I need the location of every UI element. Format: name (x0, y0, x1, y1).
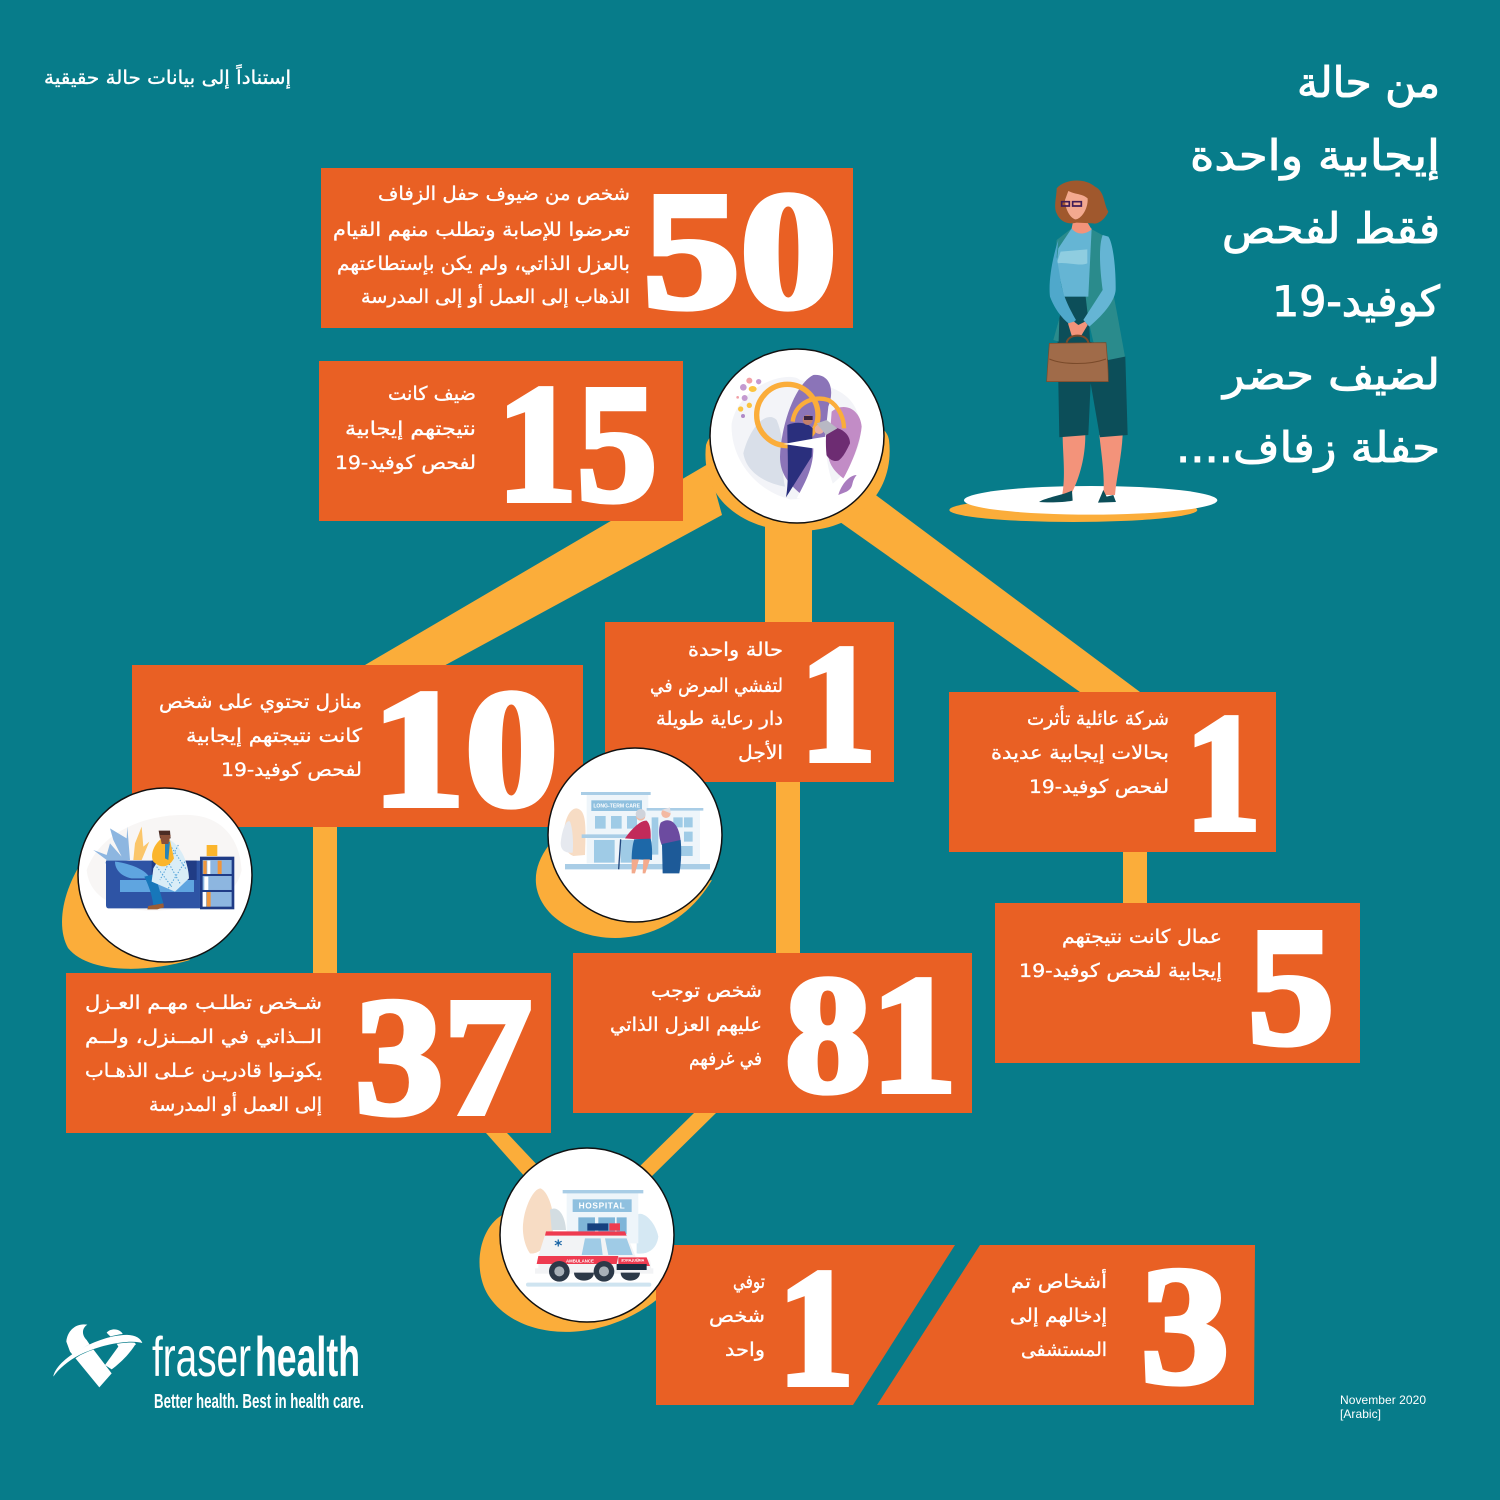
date note: November 2020 (1340, 1393, 1426, 1407)
text: 15 description: نتيجتهم إيجابية (345, 418, 476, 441)
text: workers description: عمال كانت نتيجتهم (1062, 926, 1222, 948)
text: family business description: بحالات إيجابية عديدة (991, 742, 1169, 765)
text: hospitalized description (1010, 1269, 1107, 1361)
icon circle: long-term care home (548, 748, 722, 922)
title: من حالة (1297, 58, 1440, 107)
connector network (313, 464, 1147, 1178)
number: 37: 37 (355, 964, 532, 1150)
text: 37 description: يكونـوا قادريـن عـلى الذهـاب (85, 1060, 322, 1082)
logo wordmark: fraser (152, 1325, 251, 1388)
logo tagline: Better health. Best in health care. (154, 1391, 364, 1413)
illustration: ambulance in front of hospital: ƎƆИA⅃UᗺMA (621, 1258, 645, 1263)
text: 37 description: شـخص تطلـب مهـم العـزل (85, 992, 322, 1014)
blob: behind sofa circle (62, 868, 190, 969)
text: family business description (991, 705, 1169, 798)
text: 50 description: شخص من ضيوف حفل الزفاف (378, 183, 630, 205)
text: 50 description (333, 183, 630, 309)
text: 50 description: تعرضوا للإصابة وتطلب منهم القيام (333, 219, 630, 241)
text: family business description: شركة عائلية تأثرت (1027, 705, 1169, 730)
number: 3: 3 (1141, 1233, 1229, 1419)
text: death description (709, 1271, 765, 1361)
illustration: ambulance in front of hospital: AMBULANCE (566, 1259, 594, 1264)
illustration: ambulance in front of hospital: * (554, 1237, 562, 1255)
text: 50 description: بالعزل الذاتي، ولم يكن بإستطاعتهم (337, 253, 630, 276)
text: 37 description (85, 992, 322, 1117)
title (1176, 58, 1440, 472)
icon circle: sick person on sofa (78, 788, 252, 962)
blob: behind wedding circle (705, 411, 890, 531)
text: 81 description (610, 980, 762, 1070)
text: workers description (1019, 926, 1222, 983)
panel: 15 positive guests (319, 351, 683, 537)
text: hospitalized description: المستشفى (1021, 1339, 1107, 1361)
title: فقط لفحص (1222, 204, 1440, 253)
blob: behind long-term care circle (536, 845, 712, 938)
title: حفلة زفاف.... (1176, 423, 1440, 472)
panel: 50 wedding guests (321, 158, 853, 344)
text: 37 description: إلى العمل أو المدرسة (149, 1092, 322, 1117)
text: 10 description: منازل تحتوي على شخص (159, 691, 362, 713)
logo mark: heart with swoosh (53, 1324, 142, 1387)
text: 15 description: ضيف كانت (388, 383, 476, 405)
text: family business description: لفحص كوفيد-19 (1029, 776, 1169, 798)
number: 10: 10 (372, 656, 558, 842)
panel: 81 isolating in rooms (573, 942, 972, 1128)
illustration: seniors outside care home (561, 792, 710, 873)
text: 15 description: لفحص كوفيد-19 (335, 452, 476, 474)
text: 81 description: في غرفهم (689, 1048, 762, 1070)
subtitle: based on a real case: إستناداً إلى بيانات حالة حقيقية (44, 64, 291, 90)
icon circle: wedding couple (710, 349, 884, 523)
text: hospitalized description: أشخاص تم (1011, 1269, 1107, 1293)
text: 37 description: الــذاتي في المــنزل، ولــم (85, 1026, 322, 1048)
panel: 10 households (132, 656, 583, 842)
text: death description: واحد (725, 1339, 765, 1361)
blob: behind hospital circle (480, 1215, 668, 1332)
number: 1: 1 (778, 1235, 854, 1421)
text: care description: حالة واحدة (688, 639, 783, 661)
number: 1: 1 (1185, 680, 1261, 866)
text: 15 description (335, 383, 476, 474)
panel: 1 death (656, 1235, 955, 1421)
number: 50: 50 (643, 158, 837, 344)
panel: 1 family business (949, 680, 1276, 866)
text: hospitalized description: إدخالهم إلى (1010, 1305, 1107, 1328)
date note (1340, 1393, 1426, 1421)
illustration: wedding rings and couple (732, 375, 862, 499)
text: 10 description: كانت نتيجتهم إيجابية (186, 725, 363, 748)
text: care description: الأجل (738, 741, 783, 764)
text: 81 description: شخص توجب (651, 980, 762, 1002)
text: care description: لتفشي المرض في (650, 675, 783, 697)
text: 81 description: عليهم العزل الذاتي (610, 1014, 762, 1036)
logo: Fraser Health (53, 1324, 364, 1413)
panel: 3 hospitalized (877, 1233, 1255, 1419)
number: 15: 15 (497, 351, 657, 537)
text: 50 description: الذهاب إلى العمل أو إلى المدرسة (361, 284, 630, 309)
text: care description: دار رعاية طويلة (656, 708, 783, 730)
logo: Fraser Health: health (255, 1325, 360, 1388)
illustration: person wrapped in blanket on sofa (87, 815, 242, 911)
illustration: seniors outside care home: LONG-TERM CARE (593, 804, 640, 810)
number: 5: 5 (1248, 894, 1334, 1080)
illustration: ambulance in front of hospital (523, 1188, 658, 1287)
panel: 5 workers (995, 894, 1360, 1080)
illustration: ambulance in front of hospital: HOSPITAL (579, 1201, 625, 1211)
icon circle: hospital and ambulance (500, 1148, 674, 1322)
illustration: woman with briefcase on a podium (949, 180, 1217, 522)
title: إيجابية واحدة (1190, 131, 1440, 181)
panel: 37 people self-isolating (66, 964, 551, 1150)
title: كوفيد-19 (1272, 277, 1440, 326)
text: death description: شخص (709, 1305, 765, 1327)
number: 81: 81 (785, 942, 957, 1128)
text: death description: توفي (733, 1271, 765, 1293)
number: 1: 1 (800, 611, 876, 797)
text: 10 description (159, 691, 363, 781)
title: لضيف حضر (1221, 350, 1440, 399)
text: workers description: إيجابية لفحص كوفيد-19 (1019, 960, 1222, 983)
date note: [Arabic] (1340, 1407, 1381, 1421)
text: 10 description: لفحص كوفيد-19 (221, 759, 362, 781)
panel: 1 long-term care outbreak (605, 611, 894, 797)
text: care description (650, 639, 783, 764)
